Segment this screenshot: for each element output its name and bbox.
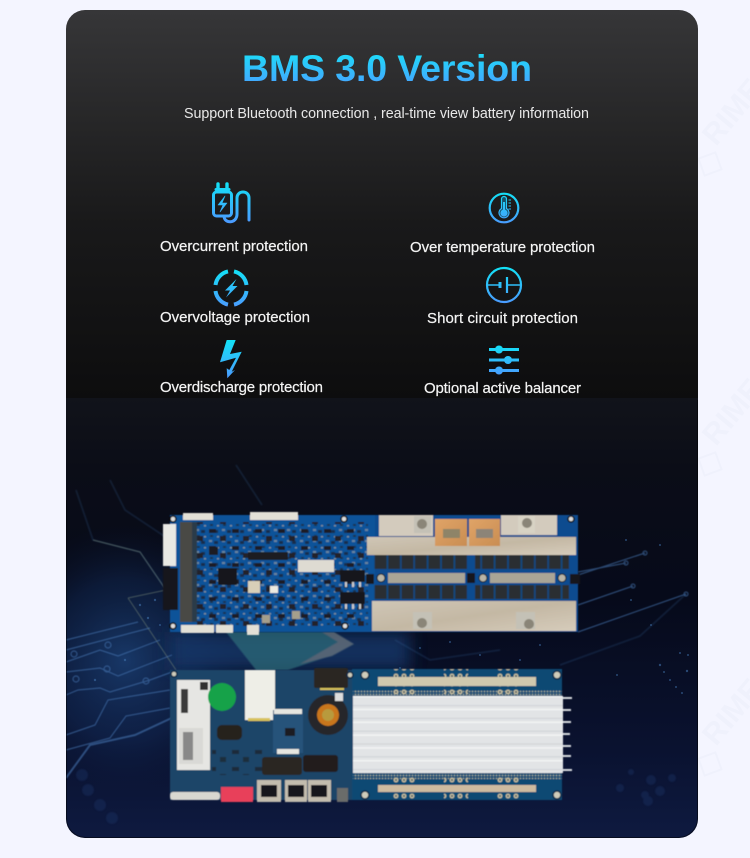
chips (209, 547, 365, 623)
label: Optional active balancer (424, 380, 581, 397)
circuit board: bottom view (170, 668, 572, 802)
feature: overdischarge protection (160, 340, 323, 396)
solder pad rows (353, 669, 562, 800)
icon: lightning ring (216, 271, 246, 305)
pcb base (374, 514, 579, 633)
metal bars (378, 677, 536, 792)
label: Over temperature protection (410, 239, 595, 256)
icon: thermometer (490, 194, 518, 222)
white edge strip (170, 792, 220, 800)
label: Overdischarge protection (160, 379, 323, 396)
reset button (337, 788, 348, 802)
background chip between boards (226, 632, 354, 670)
icon: battery symbol circle (487, 268, 521, 302)
connectors (163, 512, 298, 635)
label: Overvoltage protection (160, 309, 310, 326)
side black tabs (366, 573, 580, 584)
pcb base (352, 696, 354, 774)
toroid inductor (308, 695, 348, 735)
green sticker (208, 683, 236, 711)
icon: sliders (489, 346, 519, 374)
feature: optional active balancer (424, 346, 581, 397)
electrolytic capacitors (262, 668, 348, 775)
title: BMS 3.0 Version (242, 47, 532, 89)
feature: overcurrent protection (160, 184, 308, 255)
label: Overcurrent protection (160, 238, 308, 255)
upper dark gradient (66, 10, 698, 398)
connector column (180, 522, 192, 622)
cement resistor (245, 670, 275, 721)
feature: over temperature protection (410, 194, 595, 256)
icon: charger plug (214, 184, 249, 222)
mounting holes (170, 516, 574, 629)
panel lower edge (66, 400, 698, 838)
lower circuit background (0, 398, 698, 838)
feature: overvoltage protection (160, 271, 310, 326)
heat sink (353, 696, 572, 773)
watermarks (696, 73, 750, 776)
small capacitor (217, 725, 242, 740)
daughter board (273, 709, 303, 754)
corner holes (171, 671, 561, 799)
screws (377, 516, 566, 629)
gold plates (435, 519, 500, 546)
metal plates (367, 515, 576, 631)
subtitle: Support Bluetooth connection , real-time view battery information (184, 106, 589, 122)
label: Short circuit protection (427, 310, 578, 327)
dip switch (221, 787, 253, 802)
mosfet rows (374, 555, 569, 599)
icon: lightning arrow (220, 340, 242, 378)
white label (177, 680, 210, 770)
feature: short circuit protection (427, 268, 578, 327)
rj45 ports (257, 780, 331, 802)
circuit board: top view (163, 512, 580, 635)
